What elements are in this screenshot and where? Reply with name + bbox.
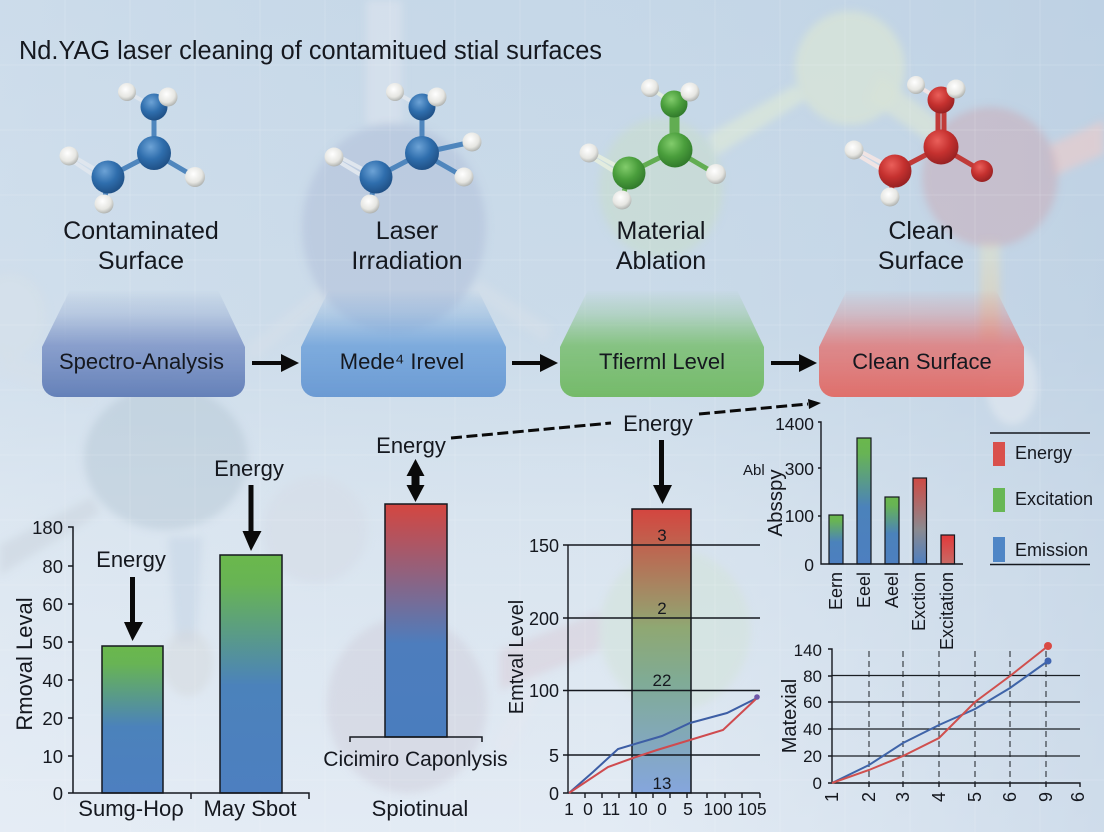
energy callout 2: Energy xyxy=(214,456,284,481)
icon: blue molecule contaminated xyxy=(60,83,205,214)
y tick labels: 50 xyxy=(42,632,63,653)
y tick labels: 80 xyxy=(42,556,63,577)
grid and axes xyxy=(563,545,760,798)
dashed energy arrow xyxy=(451,399,821,438)
x labels xyxy=(78,796,296,821)
panel: thermal level: Tfierml Level xyxy=(599,349,725,374)
x ticks: 2 xyxy=(859,792,879,802)
line: blue series xyxy=(832,658,1052,783)
dashed verticals xyxy=(869,651,1046,783)
title: Nd.YAG laser cleaning of contamitued stial surfaces xyxy=(19,37,602,65)
x ticks: 5 xyxy=(683,799,693,819)
panel: clean surface: Clean Surface xyxy=(852,349,992,374)
rotated x labels: Eeel xyxy=(854,572,874,608)
rotated x labels: Eern xyxy=(826,572,846,610)
values in bar: 2 xyxy=(657,599,667,618)
y ticks: 140 xyxy=(794,641,822,660)
x labels: Sumg-Hoρ xyxy=(78,796,184,821)
x ticks xyxy=(822,792,1088,802)
legend: excitation: Excitation xyxy=(1015,489,1093,509)
y tick labels: 20 xyxy=(42,708,63,729)
x ticks: 9 xyxy=(1036,792,1056,802)
x ticks: 10 xyxy=(628,799,648,819)
x ticks: 5 xyxy=(965,792,985,802)
line: red xyxy=(569,698,757,793)
y title fragment: Abl xyxy=(743,462,765,479)
arrow xyxy=(252,354,299,372)
panel: spectro-analysis xyxy=(42,290,245,397)
label: contaminated surface: Contaminated xyxy=(63,217,219,245)
y ticks: 1400 xyxy=(775,414,814,434)
chart: single bar xyxy=(323,504,508,821)
x ticks: 105 xyxy=(737,799,767,819)
chart: single bar: Cicimiro Caponlysis xyxy=(323,748,508,771)
y ticks: 0 xyxy=(804,555,814,575)
chart: emission level xyxy=(506,509,767,819)
y ticks: 40 xyxy=(803,720,822,739)
chart: absorption bars xyxy=(743,414,963,650)
energy callout 1: Energy xyxy=(96,547,166,572)
y tick labels: 60 xyxy=(42,594,63,615)
values in bar: 13 xyxy=(653,774,671,793)
y ticks: 150 xyxy=(529,536,559,556)
x ticks: 1 xyxy=(822,792,842,802)
y ticks: 60 xyxy=(803,693,822,712)
y ticks xyxy=(529,536,559,804)
label: material ablation: Ablation xyxy=(616,247,706,275)
y title: Absspy xyxy=(764,469,787,537)
legend: energy: Energy xyxy=(1015,443,1072,463)
icon: red molecule xyxy=(844,76,993,206)
y title: Mateхial xyxy=(779,679,801,753)
x ticks: 3 xyxy=(893,792,913,802)
panel: mede irevel: Mede⁴ Irevel xyxy=(340,349,464,374)
arrow xyxy=(771,354,817,372)
bar 3 xyxy=(885,497,899,564)
bar 5 xyxy=(941,535,954,564)
panel: spectro-analysis: Spectro-Analysis xyxy=(59,349,224,374)
x labels: May Sbot xyxy=(204,796,296,821)
y ticks xyxy=(794,641,822,793)
bar 4 xyxy=(913,478,926,564)
icon: blue molecule laser xyxy=(324,83,482,214)
energy callout 1 xyxy=(96,547,166,641)
y ticks: 100 xyxy=(529,681,559,701)
line: blue xyxy=(569,698,757,793)
x ticks: 1 xyxy=(564,799,574,819)
values in bar: 22 xyxy=(653,671,671,690)
label: contaminated surface: Surface xyxy=(98,247,184,275)
bar 2 xyxy=(857,438,871,564)
energy callout 4: Energy xyxy=(623,411,693,436)
rotated x labels xyxy=(826,572,957,650)
stacked bar xyxy=(632,509,691,793)
energy callout 3 xyxy=(376,433,446,502)
y tick labels: 40 xyxy=(42,670,63,691)
values in bar: 3 xyxy=(657,526,667,545)
rotated x labels: Excitation xyxy=(937,572,957,650)
y ticks: 200 xyxy=(529,609,559,629)
legend xyxy=(990,433,1093,564)
axes xyxy=(818,422,963,564)
grid xyxy=(832,676,1080,756)
y tick labels xyxy=(32,517,63,804)
y ticks: 300 xyxy=(785,459,814,479)
x ticks: 4 xyxy=(929,792,949,802)
arrow xyxy=(512,354,558,372)
y ticks: 5 xyxy=(549,746,559,766)
chart: single bar: Spiotinual xyxy=(372,796,468,821)
bracket xyxy=(350,737,482,742)
chart: removal level bars xyxy=(12,517,309,821)
energy callout 2 xyxy=(214,456,284,551)
panel: thermal level xyxy=(560,290,764,397)
panel: mede irevel xyxy=(301,290,506,397)
label: clean surface: Surface xyxy=(878,247,964,275)
energy callout 4 xyxy=(623,411,693,504)
axes xyxy=(68,527,309,799)
legend: emission: Emission xyxy=(1015,540,1088,560)
y tick labels: 0 xyxy=(53,783,63,804)
y tick labels: 180 xyxy=(32,517,63,538)
label: clean surface: Clean xyxy=(888,217,954,245)
energy callout 3: Energy xyxy=(376,433,446,458)
y axis title: Rmoval Leval xyxy=(12,597,37,731)
panel: clean surface xyxy=(819,290,1024,397)
icon: green molecule xyxy=(580,79,726,210)
x ticks: 6 xyxy=(1000,792,1020,802)
y ticks: 0 xyxy=(813,774,822,793)
values in bar xyxy=(653,526,671,793)
x ticks: 0 xyxy=(657,799,667,819)
y ticks xyxy=(775,414,814,575)
x ticks xyxy=(564,799,767,819)
bar 1 xyxy=(829,515,843,564)
rotated x labels: Exction xyxy=(909,572,929,631)
y tick labels: 10 xyxy=(42,746,63,767)
axes xyxy=(828,649,1080,787)
end dot xyxy=(754,694,760,700)
label: laser irradiation: Laser xyxy=(376,217,438,245)
line: red series xyxy=(832,642,1052,783)
x ticks: 6 xyxy=(1068,792,1088,802)
x ticks: 100 xyxy=(703,799,733,819)
y ticks: 20 xyxy=(803,747,822,766)
y axis title: Emtval Level xyxy=(506,600,528,714)
y ticks: 0 xyxy=(549,784,559,804)
x ticks: 11 xyxy=(602,799,620,819)
y ticks: 80 xyxy=(803,667,822,686)
y ticks: 100 xyxy=(785,506,814,526)
chart: material lines xyxy=(779,641,1088,802)
bar: sumg-hop xyxy=(102,646,163,793)
x ticks: 0 xyxy=(583,799,593,819)
label: material ablation: Material xyxy=(617,217,705,245)
rotated x labels: Aeel xyxy=(882,572,902,608)
label: laser irradiation: Irradiation xyxy=(351,247,463,275)
bar: may sbot xyxy=(220,555,282,793)
